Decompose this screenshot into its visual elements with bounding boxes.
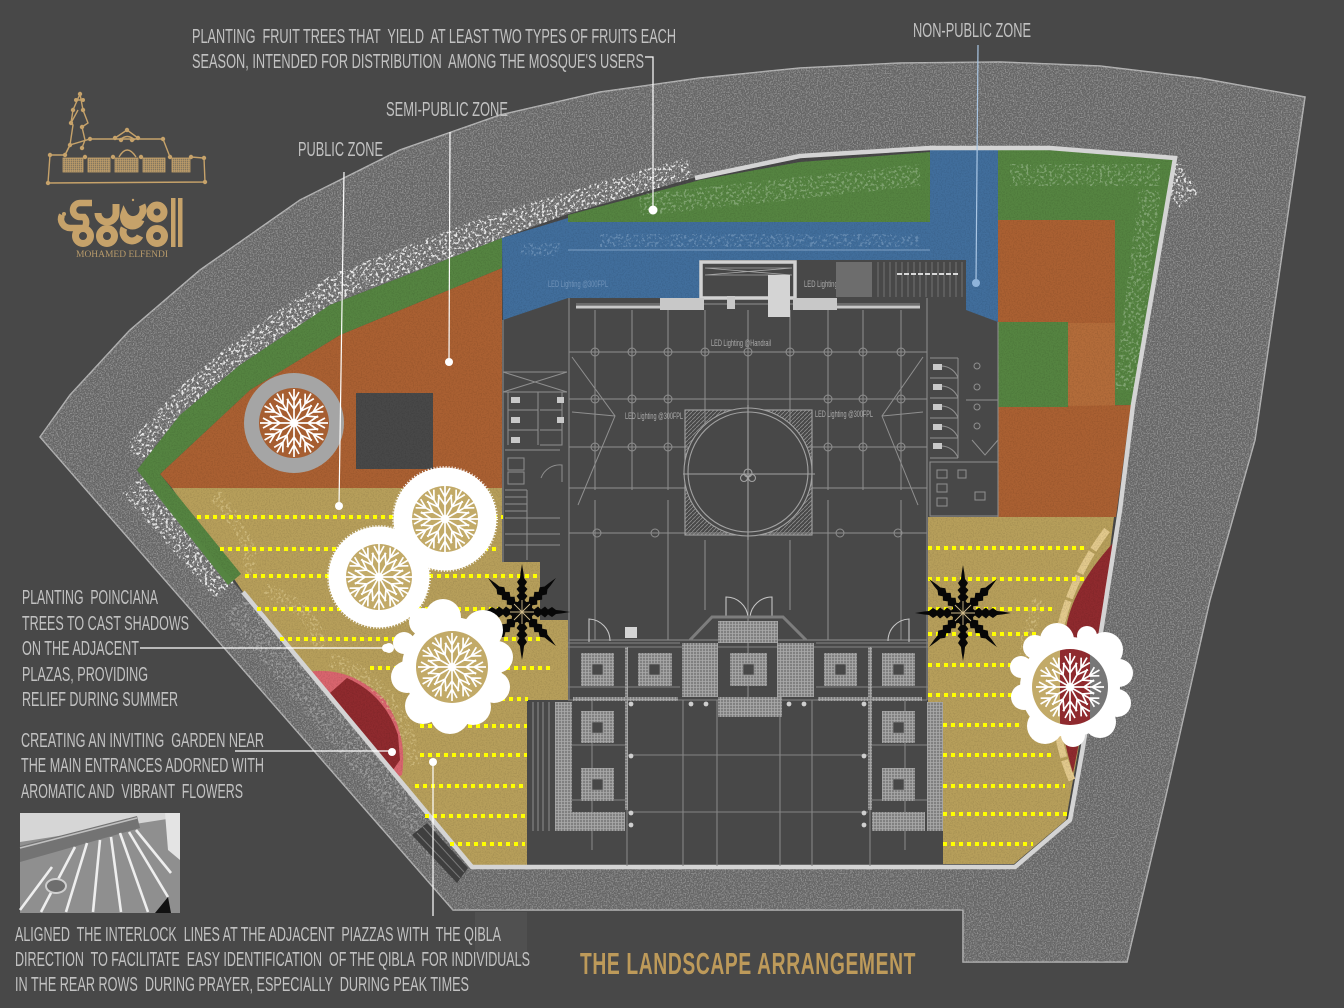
- heading: non-public zone: NON-PUBLIC ZONE: [913, 20, 1031, 42]
- text: poinciana note: ON THE ADJACENT: [22, 638, 139, 660]
- text: poinciana note: PLANTING POINCIANA: [22, 587, 158, 609]
- title: THE LANDSCAPE ARRANGEMENT: [580, 946, 916, 981]
- leader: public zone: [335, 172, 344, 510]
- icon: grey tree in semi-public zone: [244, 373, 344, 473]
- LED lighting notes: LED Lighting @300FPL: [625, 411, 683, 421]
- text: poinciana note: PLAZAS, PROVIDING: [22, 664, 148, 686]
- logo: designer name: MOHAMED ELFENDI: [76, 249, 168, 259]
- planting zone: green areas: [137, 147, 1175, 585]
- flower garden: left: [307, 671, 403, 778]
- void square: [356, 393, 433, 469]
- leader: garden: [235, 748, 396, 756]
- interlock lines aligned with qibla: right plaza: [928, 548, 1085, 844]
- LED lighting notes: LED Lighting @300FPL: [548, 279, 608, 289]
- icon: poinciana tree 3: [384, 599, 513, 734]
- icon: palm star left: [474, 564, 570, 660]
- LED lighting notes: LED Lighting @Handrail: [711, 338, 771, 348]
- leader: poinciana trees: [140, 644, 390, 652]
- public zone: sand plazas: [172, 488, 1114, 866]
- icon: poinciana tree 1: [394, 468, 496, 570]
- text: garden note: CREATING AN INVITING GARDEN NEAR: [21, 730, 264, 752]
- text: poinciana note: TREES TO CAST SHADOWS: [22, 613, 189, 635]
- LED lighting notes: [548, 279, 873, 421]
- text: fruit trees note: PLANTING FRUIT TREES THAT YIELD AT LEAST TWO TYPES OF FRUITS EACH: [192, 26, 676, 48]
- text: garden note: AROMATIC AND VIBRANT FLOWERS: [21, 781, 243, 803]
- interlock lines aligned with qibla: left plaza: [197, 517, 552, 844]
- perimeter wall: [243, 148, 1175, 867]
- heading: public zone: PUBLIC ZONE: [298, 139, 383, 161]
- text: garden note: THE MAIN ENTRANCES ADORNED WITH: [21, 755, 264, 777]
- central dome: [683, 405, 815, 540]
- text: interlock lines note: IN THE REAR ROWS DURING PRAYER, ESPECIALLY DURING PEAK TIMES: [15, 974, 469, 996]
- logo: mosque line drawing: [46, 92, 207, 185]
- text: poinciana note: [22, 587, 189, 711]
- semi-public zone: terracotta areas: [160, 220, 1131, 517]
- text: poinciana note: RELIEF DURING SUMMER: [22, 689, 178, 711]
- LED lighting notes: LED Lighting @300FPL: [815, 409, 873, 419]
- leader: fruit trees: [645, 57, 658, 214]
- text: garden note: [21, 730, 264, 803]
- non-public zone: blue area: [502, 147, 998, 322]
- text: interlock lines note: ALIGNED THE INTERLOCK LINES AT THE ADJACENT PIAZZAS WITH THE QIBLA: [15, 924, 501, 946]
- heading: semi-public zone: SEMI-PUBLIC ZONE: [386, 99, 508, 121]
- icon: poinciana tree 2: [328, 526, 430, 628]
- site base: [137, 147, 1175, 866]
- text: fruit trees note: [192, 26, 676, 73]
- zone surface texture: [137, 147, 1175, 866]
- icon: poinciana tree 4: [1010, 623, 1133, 747]
- text: interlock lines note: [15, 924, 530, 996]
- text: interlock lines note: DIRECTION TO FACILITATE EASY IDENTIFICATION OF THE QIBLA FOR INDIVIDUALS: [15, 949, 530, 971]
- building floor plan linework: [503, 298, 998, 700]
- flower garden: right: [1054, 530, 1113, 780]
- icon: palm star right: [915, 565, 1011, 661]
- south entrance plaza paving: [533, 597, 943, 866]
- leader: semi-public zone: [445, 132, 453, 366]
- leader: interlock lines: [429, 758, 437, 916]
- text: fruit trees note: SEASON, INTENDED FOR DISTRIBUTION AMONG THE MOSQUE'S USERS: [192, 51, 644, 73]
- LED lighting notes: LED Lighting @300FPL: [804, 279, 866, 289]
- photo: interlock lines in piazza: [20, 813, 180, 913]
- leader: non-public zone: [972, 45, 980, 287]
- north entrance block: [576, 262, 962, 317]
- logo: calligraphic mark: [61, 198, 182, 247]
